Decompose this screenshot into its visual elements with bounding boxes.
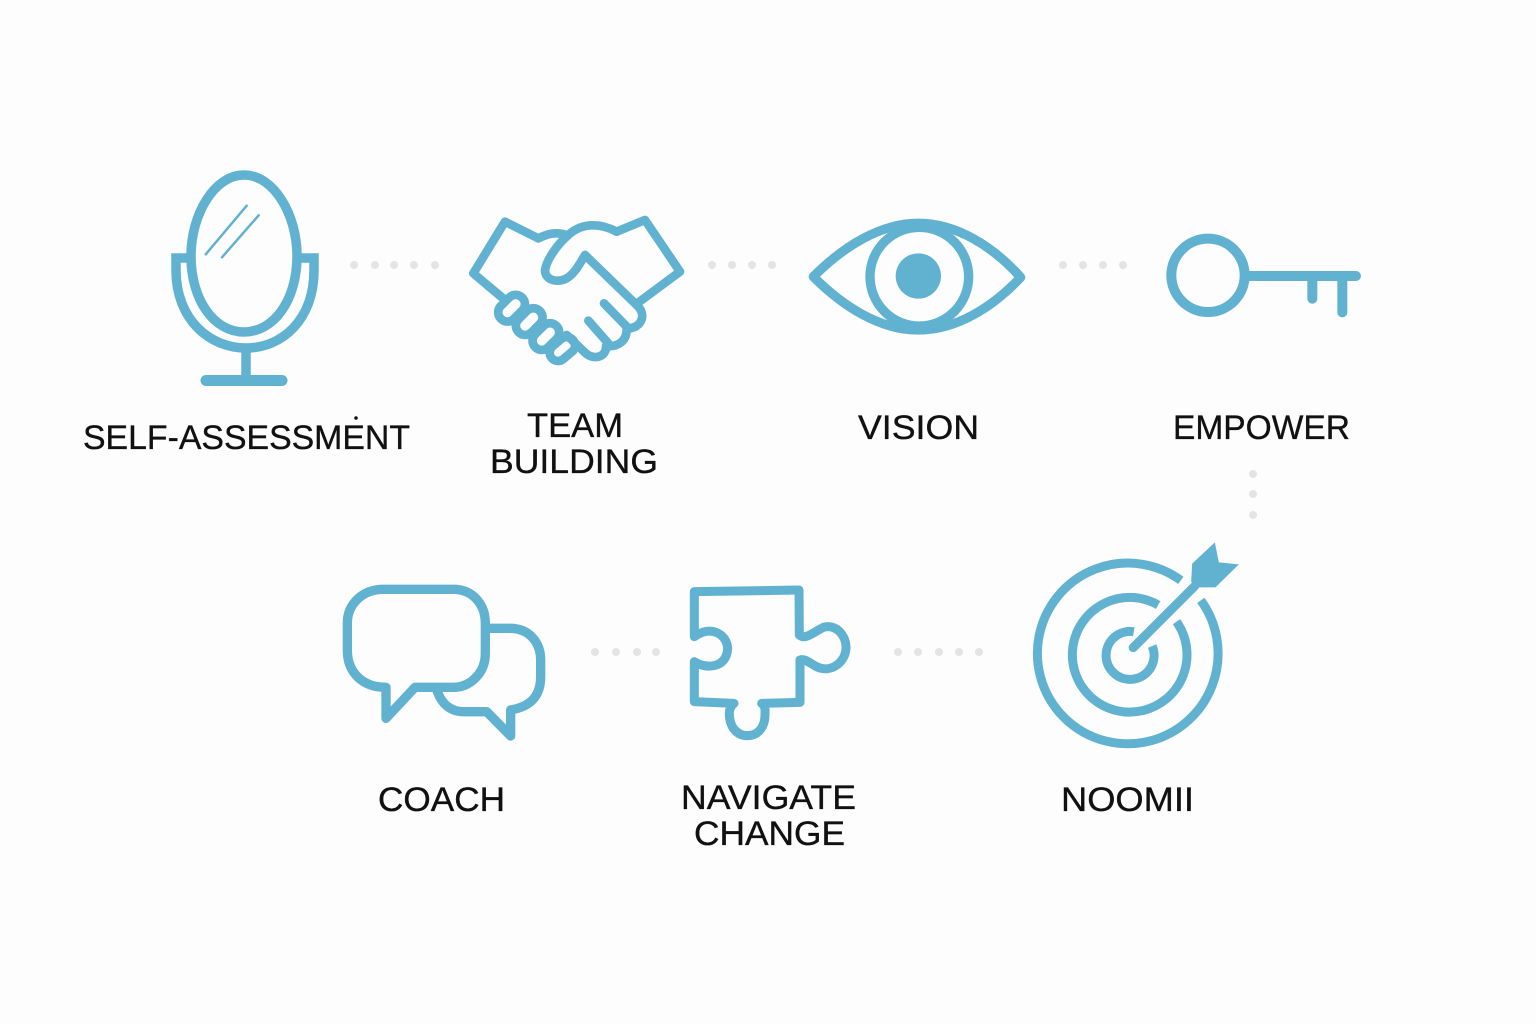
- connector: dots from navigate change to coach: [591, 648, 660, 656]
- connector: dots from team building to vision: [708, 261, 776, 269]
- icon: target with arrow: [1037, 542, 1239, 744]
- label: navigate change: [681, 779, 856, 853]
- step: team building: [473, 220, 680, 481]
- step: noomii: [1037, 542, 1239, 819]
- label: team building: [490, 407, 658, 481]
- label: navigate change: CHANGE: [694, 815, 845, 853]
- connector: dots from self-assessment to team building: [350, 261, 439, 269]
- icon: handshake: [473, 220, 680, 364]
- label: vision: VISION: [858, 409, 979, 447]
- label: coach: COACH: [378, 781, 505, 819]
- label: team building: TEAM: [527, 407, 623, 445]
- step: coach: [347, 589, 541, 819]
- connector: dots from noomii to navigate change: [894, 648, 983, 656]
- label: self-assessment: SELF-ASSESSMENT: [83, 419, 410, 457]
- icon: puzzle piece: [694, 590, 846, 736]
- step: navigate change: [681, 590, 856, 853]
- connector: dots from vision to empower: [1059, 261, 1127, 269]
- step: vision: [813, 223, 1021, 447]
- label: noomii: NOOMII: [1061, 781, 1194, 819]
- step: empower: [1171, 239, 1356, 447]
- label: empower: EMPOWER: [1173, 409, 1350, 447]
- connector: dots from empower to noomii: [1249, 470, 1257, 519]
- step: self-assessment: [83, 175, 410, 457]
- icon: speech bubbles: [347, 589, 541, 736]
- label: team building: BUILDING: [490, 443, 658, 481]
- icon: key: [1171, 239, 1356, 312]
- label: navigate change: NAVIGATE: [681, 779, 856, 817]
- icon: mirror: [176, 175, 314, 380]
- icon: eye: [813, 223, 1021, 330]
